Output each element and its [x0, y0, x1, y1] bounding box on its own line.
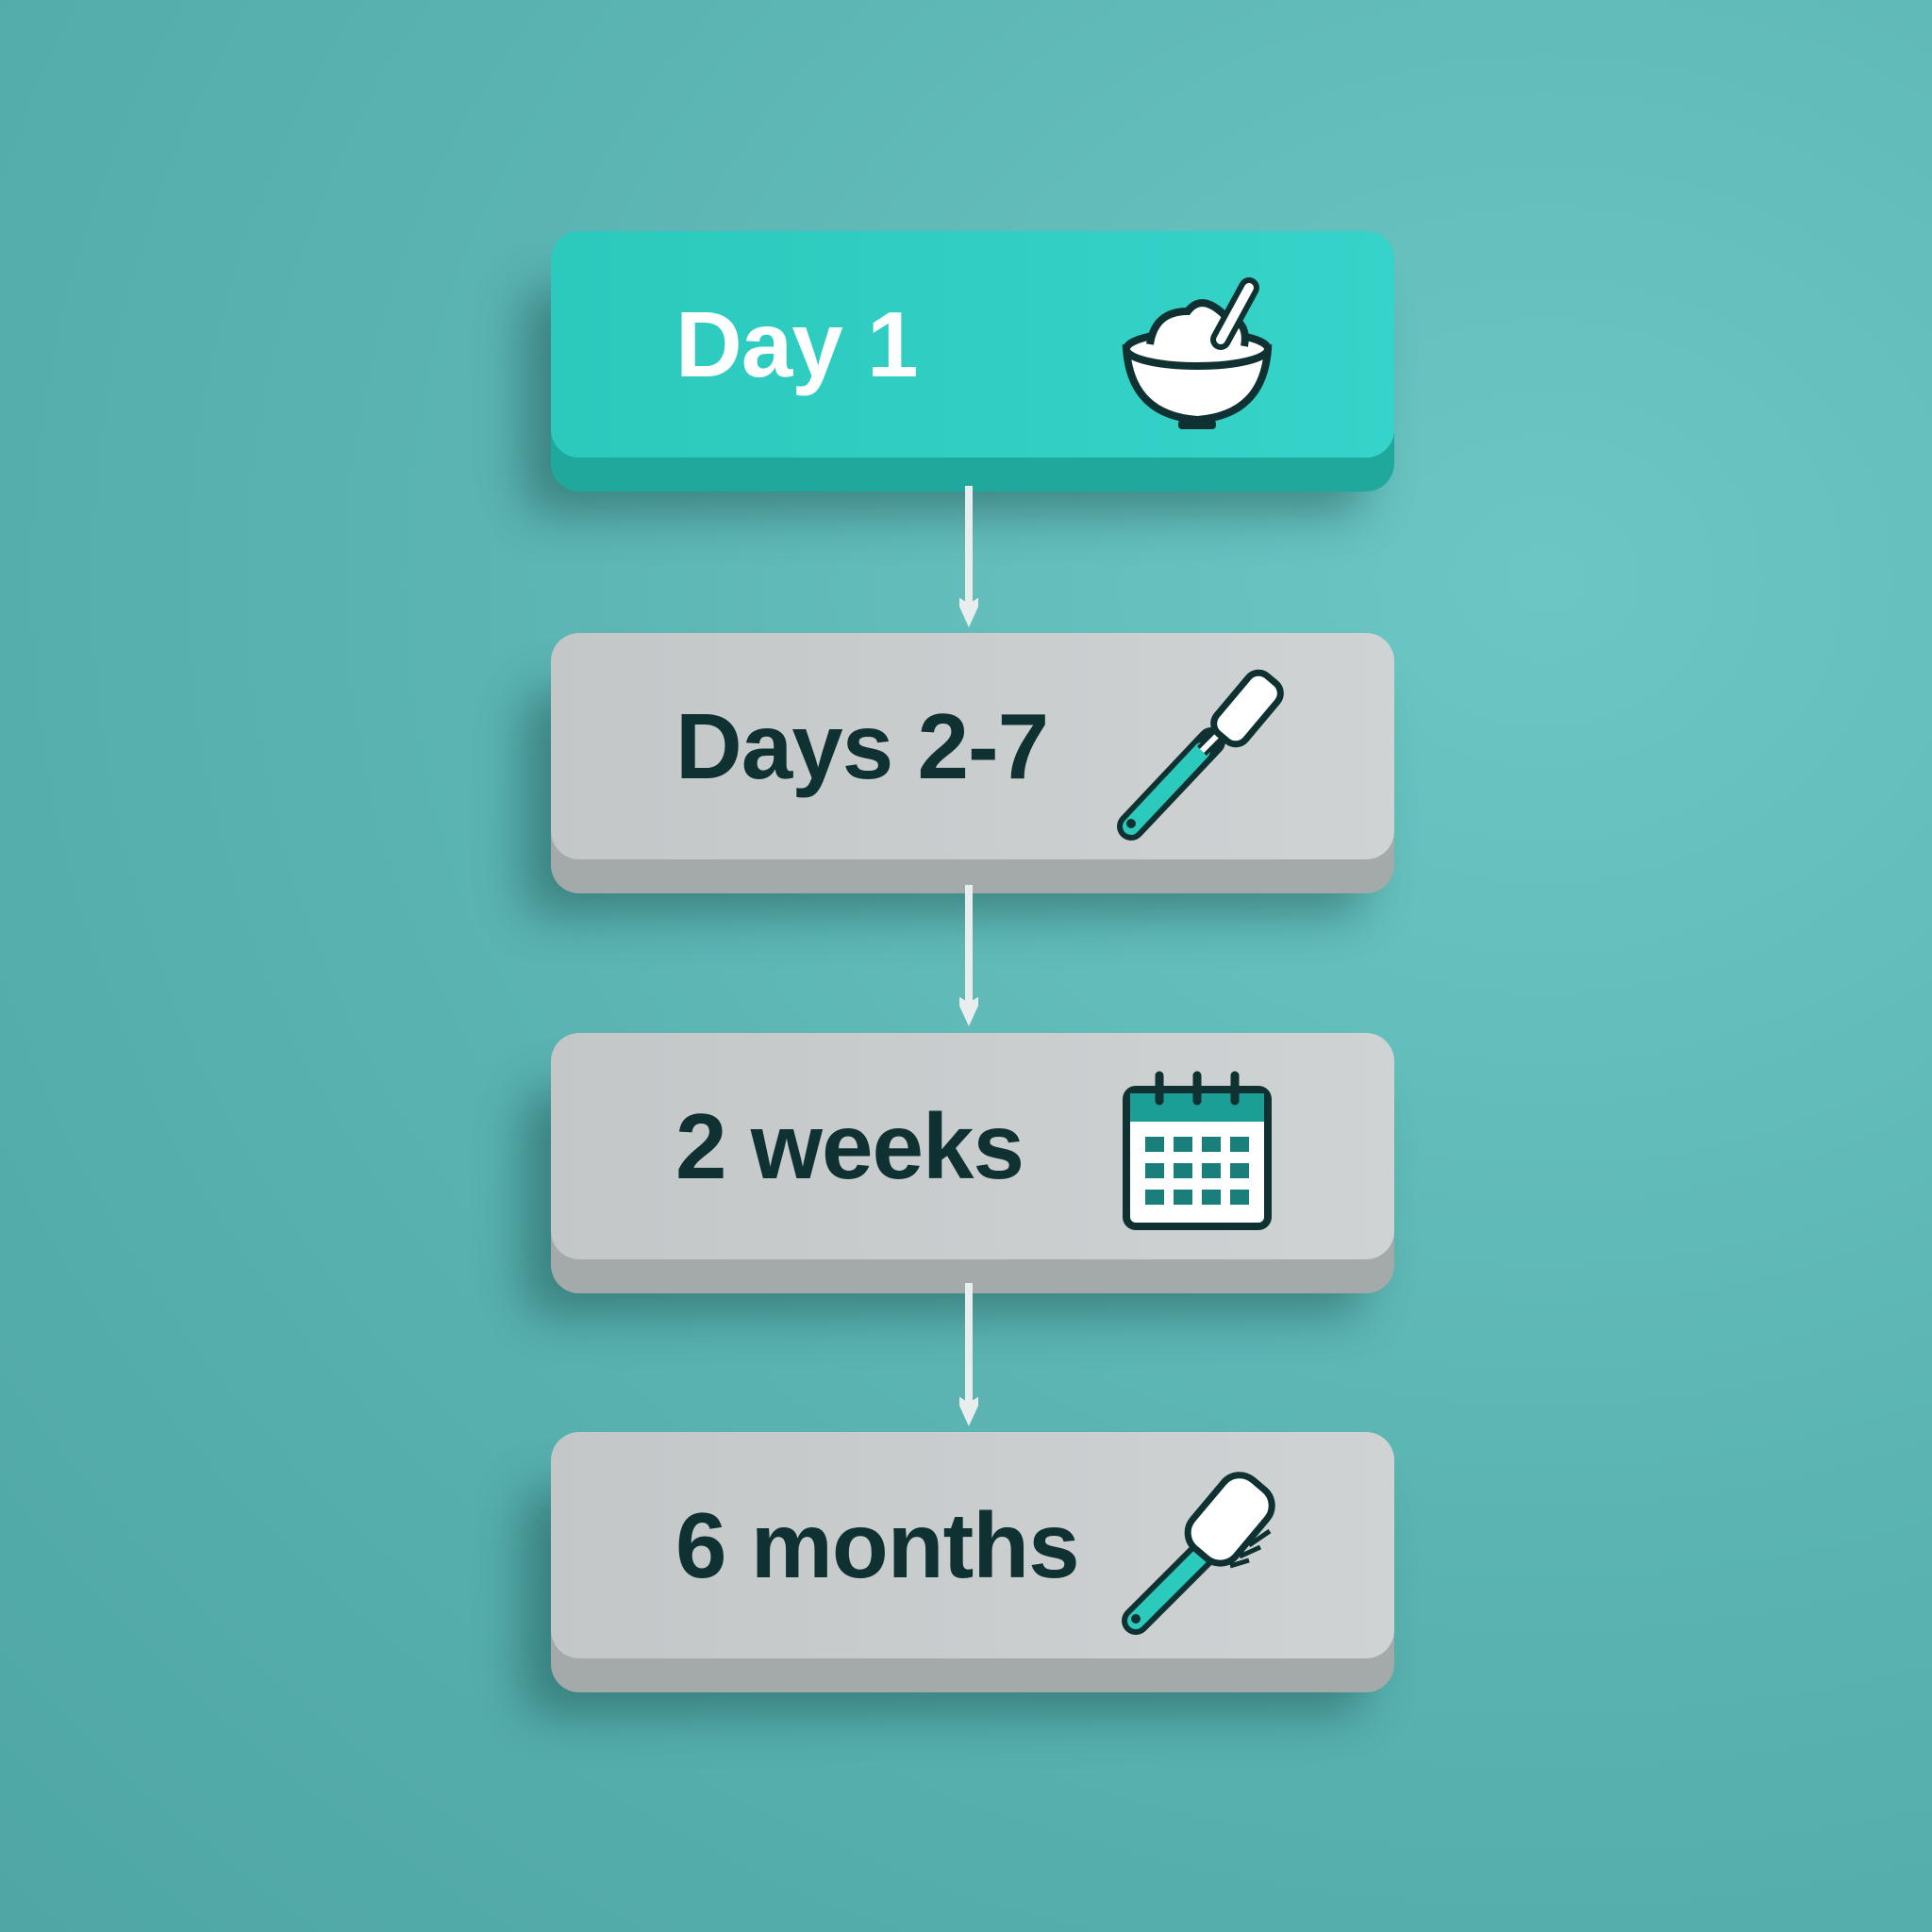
label: 6 months: 6 months	[675, 1492, 1079, 1596]
label: 2 weeks: 2 weeks	[675, 1094, 1024, 1198]
step 4: 6 months	[551, 1432, 1394, 1658]
icon: calendar	[1123, 1072, 1272, 1230]
arrow 1	[959, 486, 978, 627]
label: Day 1: Day 1	[675, 292, 918, 396]
step 1: Day 1	[551, 231, 1394, 458]
step 2: Days 2-7	[551, 633, 1394, 859]
icon: brush	[1122, 1472, 1275, 1635]
icon: toothbrush	[1117, 670, 1284, 841]
step 3: 2 weeks	[551, 1033, 1394, 1259]
arrow 3	[959, 1283, 978, 1426]
arrow 2	[959, 885, 978, 1026]
icon: bowl of soft food	[1123, 277, 1272, 429]
label: Days 2-7: Days 2-7	[675, 694, 1048, 798]
